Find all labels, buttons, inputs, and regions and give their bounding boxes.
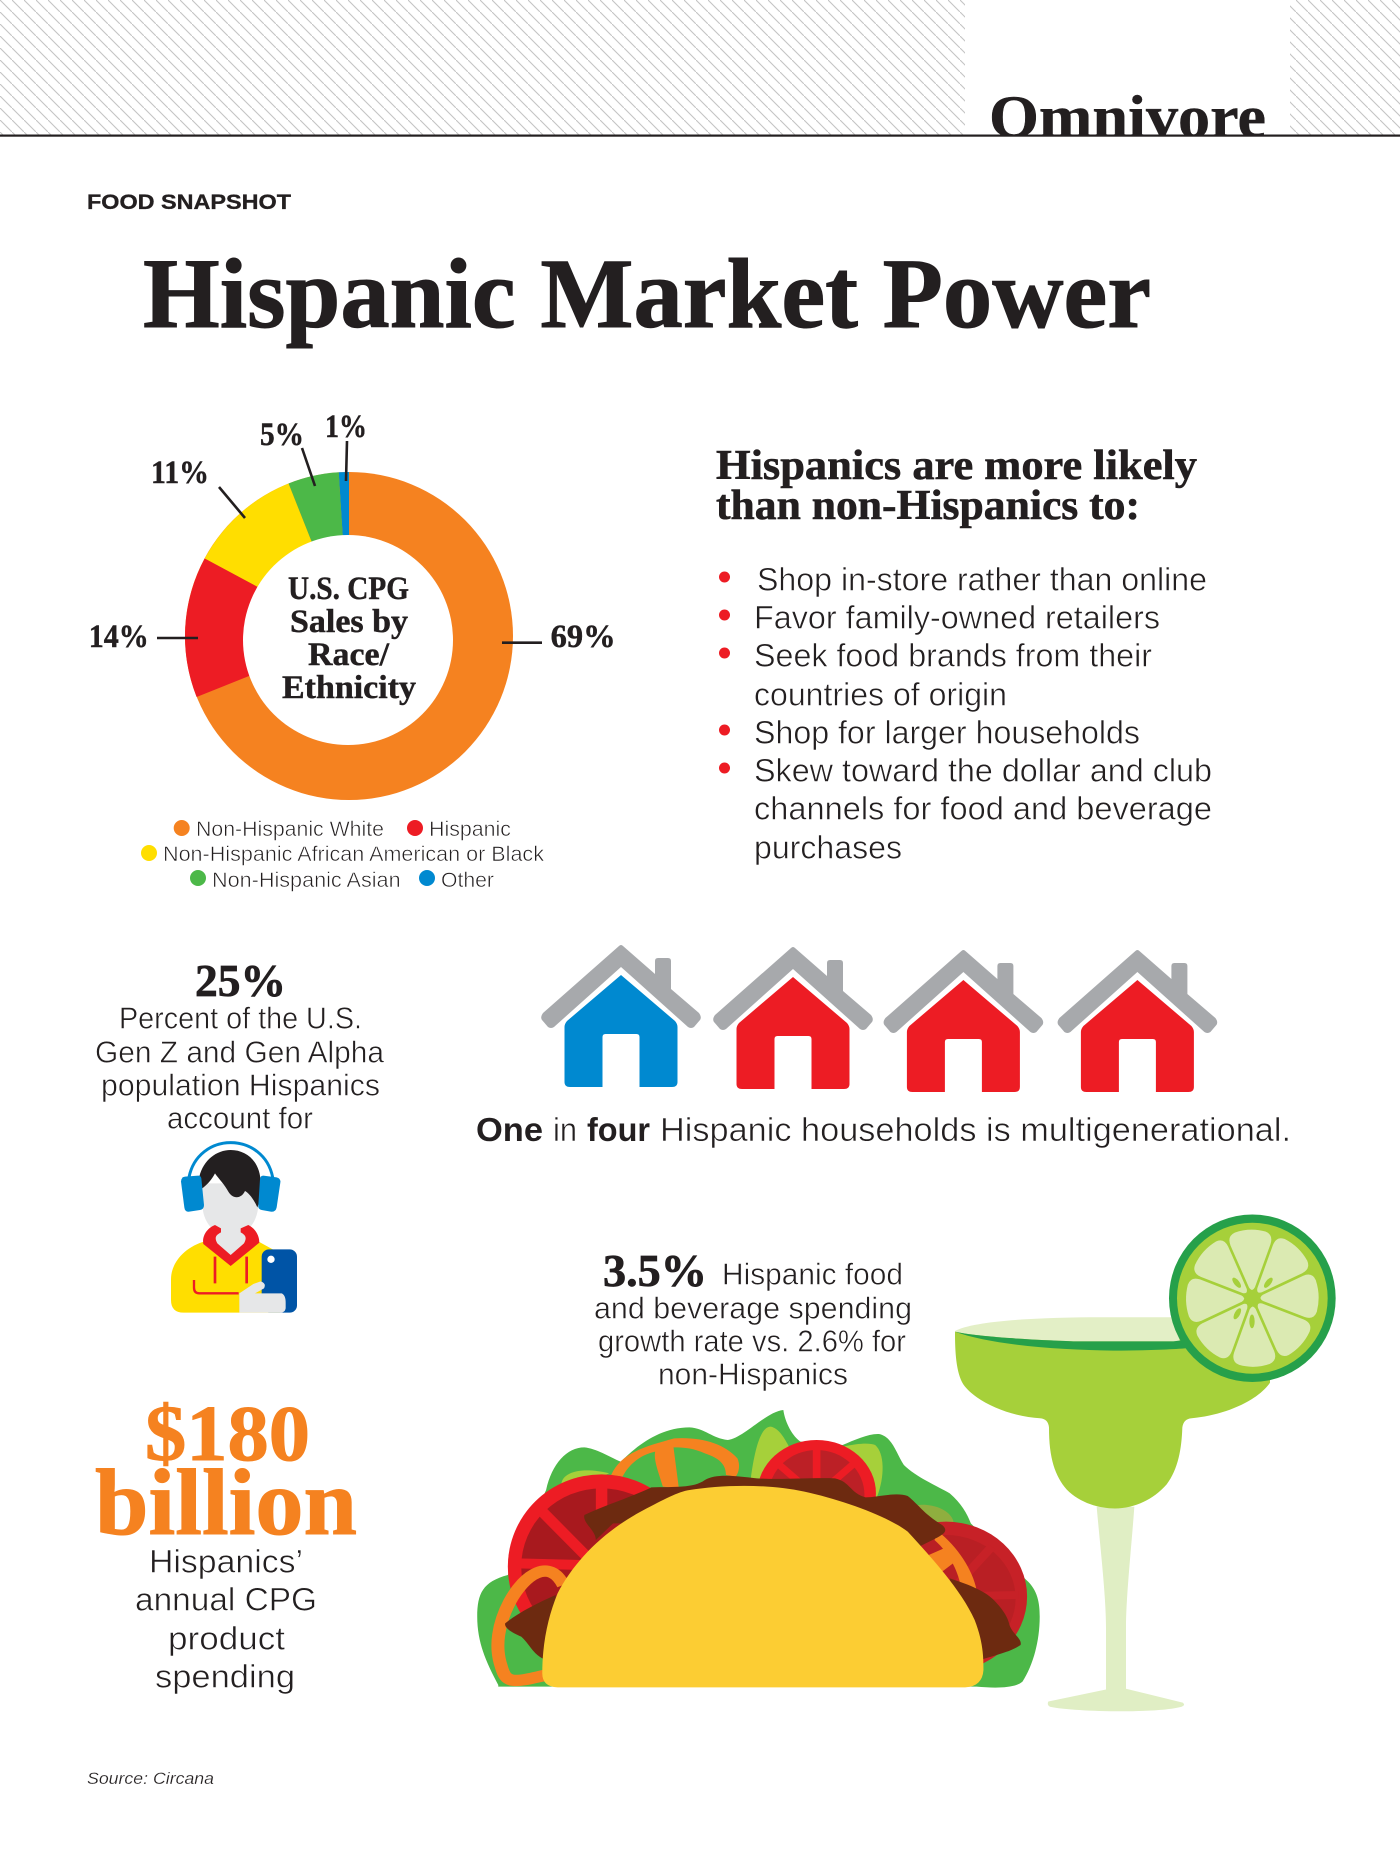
source note: Source: Circana	[87, 1769, 214, 1788]
caption: one in four: four	[587, 1111, 650, 1148]
top tomato	[757, 1440, 876, 1547]
stat: 25%	[95, 955, 385, 1136]
heading: more likely: Hispanics are more likely	[716, 443, 1197, 489]
beef filling	[505, 1476, 1021, 1660]
stat: $180 billion: billion	[95, 1451, 357, 1555]
stat: $180 billion: product	[168, 1621, 285, 1657]
heading: more likely: than non-Hispanics to:	[716, 483, 1140, 529]
icon: red house 3	[1058, 950, 1217, 1092]
stat: 3.5% growth: 3.5%	[603, 1246, 707, 1296]
stat: $180 billion: $180	[145, 1391, 310, 1478]
donut legend: Non-Hispanic Asian	[212, 869, 401, 892]
stat: $180 billion: spending	[155, 1659, 295, 1695]
percentage labels and leader lines: 5%	[260, 417, 304, 453]
donut centre label: Sales by	[290, 604, 409, 640]
icon row: four houses	[541, 945, 1217, 1092]
bullet list	[719, 562, 1212, 866]
caption: one in four: Hispanic households is multigenerational.	[660, 1111, 1291, 1148]
bullet list: Favor family-owned retailers	[754, 600, 1160, 636]
caption: one in four: One	[476, 1111, 543, 1148]
icon: taco	[477, 1410, 1040, 1688]
donut legend	[141, 818, 545, 892]
icon: red house 2	[884, 950, 1043, 1092]
stat: 3.5% growth: growth rate vs. 2.6% for	[598, 1324, 906, 1359]
stat: 25%: 25%	[195, 955, 286, 1006]
caption: one in four: in	[553, 1111, 577, 1148]
donut centre label	[282, 571, 417, 706]
right tomato	[865, 1522, 1027, 1672]
donut centre label: Ethnicity	[282, 670, 417, 706]
title: Hispanic Market Power	[143, 238, 1151, 349]
donut segments	[185, 472, 513, 800]
percentage labels and leader lines: 1%	[325, 409, 367, 445]
stat: 3.5% growth: non-Hispanics	[658, 1357, 848, 1392]
stat: 3.5% growth: Hispanic food	[722, 1257, 903, 1292]
percentage labels and leader lines: 11%	[151, 455, 209, 491]
lettuce	[477, 1410, 1040, 1688]
taco shell	[542, 1486, 983, 1687]
bullet list: countries of origin	[754, 677, 1007, 713]
stat: 25%: account for	[167, 1101, 313, 1136]
icon: blue house	[541, 945, 701, 1087]
icon: person with headphones and phone	[171, 1143, 297, 1313]
stat: 25%: Gen Z and Gen Alpha	[95, 1035, 385, 1070]
donut centre label: U.S. CPG	[288, 571, 409, 607]
bullet list: Skew toward the dollar and club	[754, 753, 1212, 789]
bullet list: channels for food and beverage	[754, 791, 1212, 827]
donut legend: Hispanic	[429, 818, 511, 841]
bullet list: Shop for larger households	[754, 715, 1140, 751]
heading: more likely	[716, 443, 1197, 529]
icon: red house 1	[713, 947, 873, 1089]
donut legend: Other	[441, 869, 494, 892]
stat: $180 billion: Hispanics’	[149, 1544, 303, 1580]
icon: lime slice	[1169, 1214, 1336, 1382]
left onion ring	[498, 1571, 563, 1680]
top onion ring	[611, 1438, 739, 1488]
donut centre label: Race/	[308, 637, 390, 673]
bullet list: Seek food brands from their	[754, 638, 1152, 674]
stat: $180 billion	[95, 1391, 357, 1695]
masthead logo: Omnivore: Omnivore	[989, 84, 1266, 150]
percentage labels and leader lines	[89, 409, 616, 655]
masthead rule	[0, 134, 1400, 137]
left tomato	[508, 1474, 695, 1659]
donut chart: U.S. CPG sales	[89, 409, 616, 892]
bullet list: purchases	[754, 830, 902, 866]
section label: FOOD SNAPSHOT	[87, 190, 291, 214]
bullet list: Shop in-store rather than online	[757, 562, 1207, 598]
stat: $180 billion: annual CPG	[135, 1582, 317, 1618]
stat: 25%: Percent of the U.S.	[119, 1001, 362, 1036]
percentage labels and leader lines: 14%	[89, 619, 149, 655]
donut legend: Non-Hispanic White	[196, 818, 384, 841]
masthead hatched band	[0, 0, 1400, 135]
stat: 3.5% growth	[594, 1246, 912, 1392]
donut legend: Non-Hispanic African American or Black	[163, 843, 545, 866]
percentage labels and leader lines: 69%	[551, 619, 616, 655]
stat: 25%: population Hispanics	[101, 1068, 380, 1103]
stat: 3.5% growth: and beverage spending	[594, 1291, 912, 1326]
icon: margarita glass	[955, 1214, 1336, 1711]
